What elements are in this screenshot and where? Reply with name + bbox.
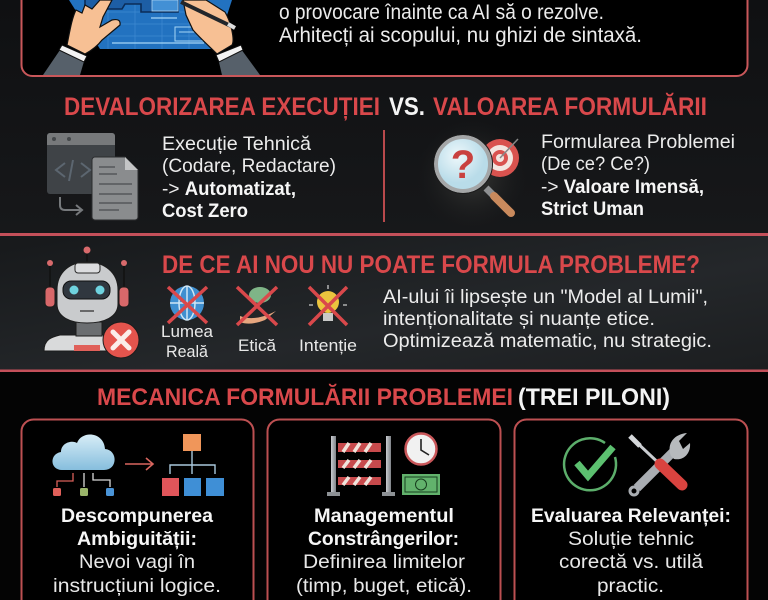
explanation text: AI-ului îi lipsește un "Model al Lumii", (383, 286, 708, 308)
icon: real world crossed (168, 286, 207, 323)
labels: missing abilities: Etică (238, 336, 277, 355)
band separators (0, 233, 768, 372)
formulation text: -> Valoare Imensă, (541, 176, 704, 198)
icon: cloud to hierarchy (52, 434, 224, 496)
pillar text: Ambiguității: (77, 529, 197, 550)
icon: check mark and tools (564, 433, 690, 495)
explanation text (383, 286, 712, 352)
labels: missing abilities: Reală (166, 342, 209, 361)
labels: missing abilities: Intenție (299, 336, 357, 355)
heading: execution vs formulation: VS. (389, 93, 425, 121)
formulation text (541, 131, 735, 220)
labels: missing abilities (161, 322, 357, 361)
pillar text: Nevoi vagi în (79, 551, 195, 573)
intro text: o provocare înainte ca AI să o rezolve. (279, 1, 604, 24)
formulation text: Formularea Problemei (541, 131, 735, 153)
pillar text: instrucțiuni logice. (53, 575, 221, 597)
icon: hands drawing on a blueprint (43, 0, 260, 75)
heading: execution vs formulation: DEVALORIZAREA EXECUȚIEI (64, 93, 380, 121)
formulation text: (De ce? Ce?) (541, 153, 650, 175)
panel: relevance evaluation (514, 420, 748, 600)
pillar text: Descompunerea (61, 506, 213, 527)
pillar text: (timp, buget, etică). (296, 575, 472, 597)
pillar text (531, 506, 731, 597)
labels: missing abilities: Lumea (161, 322, 214, 341)
icon: robot with X badge (44, 246, 139, 358)
panel: decomposing ambiguity (22, 420, 254, 600)
icon: intention crossed (309, 285, 347, 325)
heading: three pillars: (TREI PILONI) (518, 384, 670, 411)
explanation text: Optimizează matematic, nu strategic. (383, 330, 712, 352)
icon: code window and document (47, 133, 138, 220)
pillar text: Evaluarea Relevanței: (531, 506, 731, 527)
pillar text: Definirea limitelor (303, 551, 466, 573)
panel: problem formulation (417, 120, 735, 230)
icon: ethics crossed (237, 287, 277, 325)
pillar text (296, 506, 472, 597)
pillar text: Soluție tehnic (568, 528, 694, 550)
intro text (279, 1, 642, 47)
heading: execution vs formulation (64, 92, 707, 121)
icon: magnifier with question mark and target (417, 120, 527, 230)
execution text: Cost Zero (162, 201, 248, 222)
divider (383, 130, 385, 222)
panel: technical execution (47, 133, 336, 222)
pillar text: Managementul (314, 506, 454, 527)
pillar text: corectă vs. utilă (559, 551, 703, 573)
explanation text: intenționalitate și nuanțe etice. (383, 308, 655, 330)
pillar text: practic. (597, 575, 664, 597)
execution text (162, 133, 336, 222)
execution text: -> Automatizat, (162, 178, 296, 200)
panel: architects intro (22, 0, 748, 76)
heading: three pillars: MECANICA FORMULĂRII PROBLEMEI (97, 383, 513, 411)
icon: barrier, clock and money (327, 434, 440, 496)
heading: execution vs formulation: VALOAREA FORMULĂRII (433, 92, 707, 121)
pillar text: Constrângerilor: (308, 529, 459, 550)
formulation text: Strict Uman (541, 199, 644, 220)
execution text: (Codare, Redactare) (162, 155, 336, 177)
heading: why AI: DE CE AI NOU NU POATE FORMULA PROBLEME? (162, 251, 700, 279)
panel: constraint management (268, 420, 500, 600)
execution text: Execuție Tehnică (162, 133, 311, 155)
panel: why AI cannot formulate (44, 246, 712, 361)
pillar text (53, 506, 221, 597)
icon: magnifier with question mark and target: ? (451, 143, 475, 187)
intro text: Arhitecți ai scopului, nu ghizi de sintaxă. (279, 24, 642, 47)
